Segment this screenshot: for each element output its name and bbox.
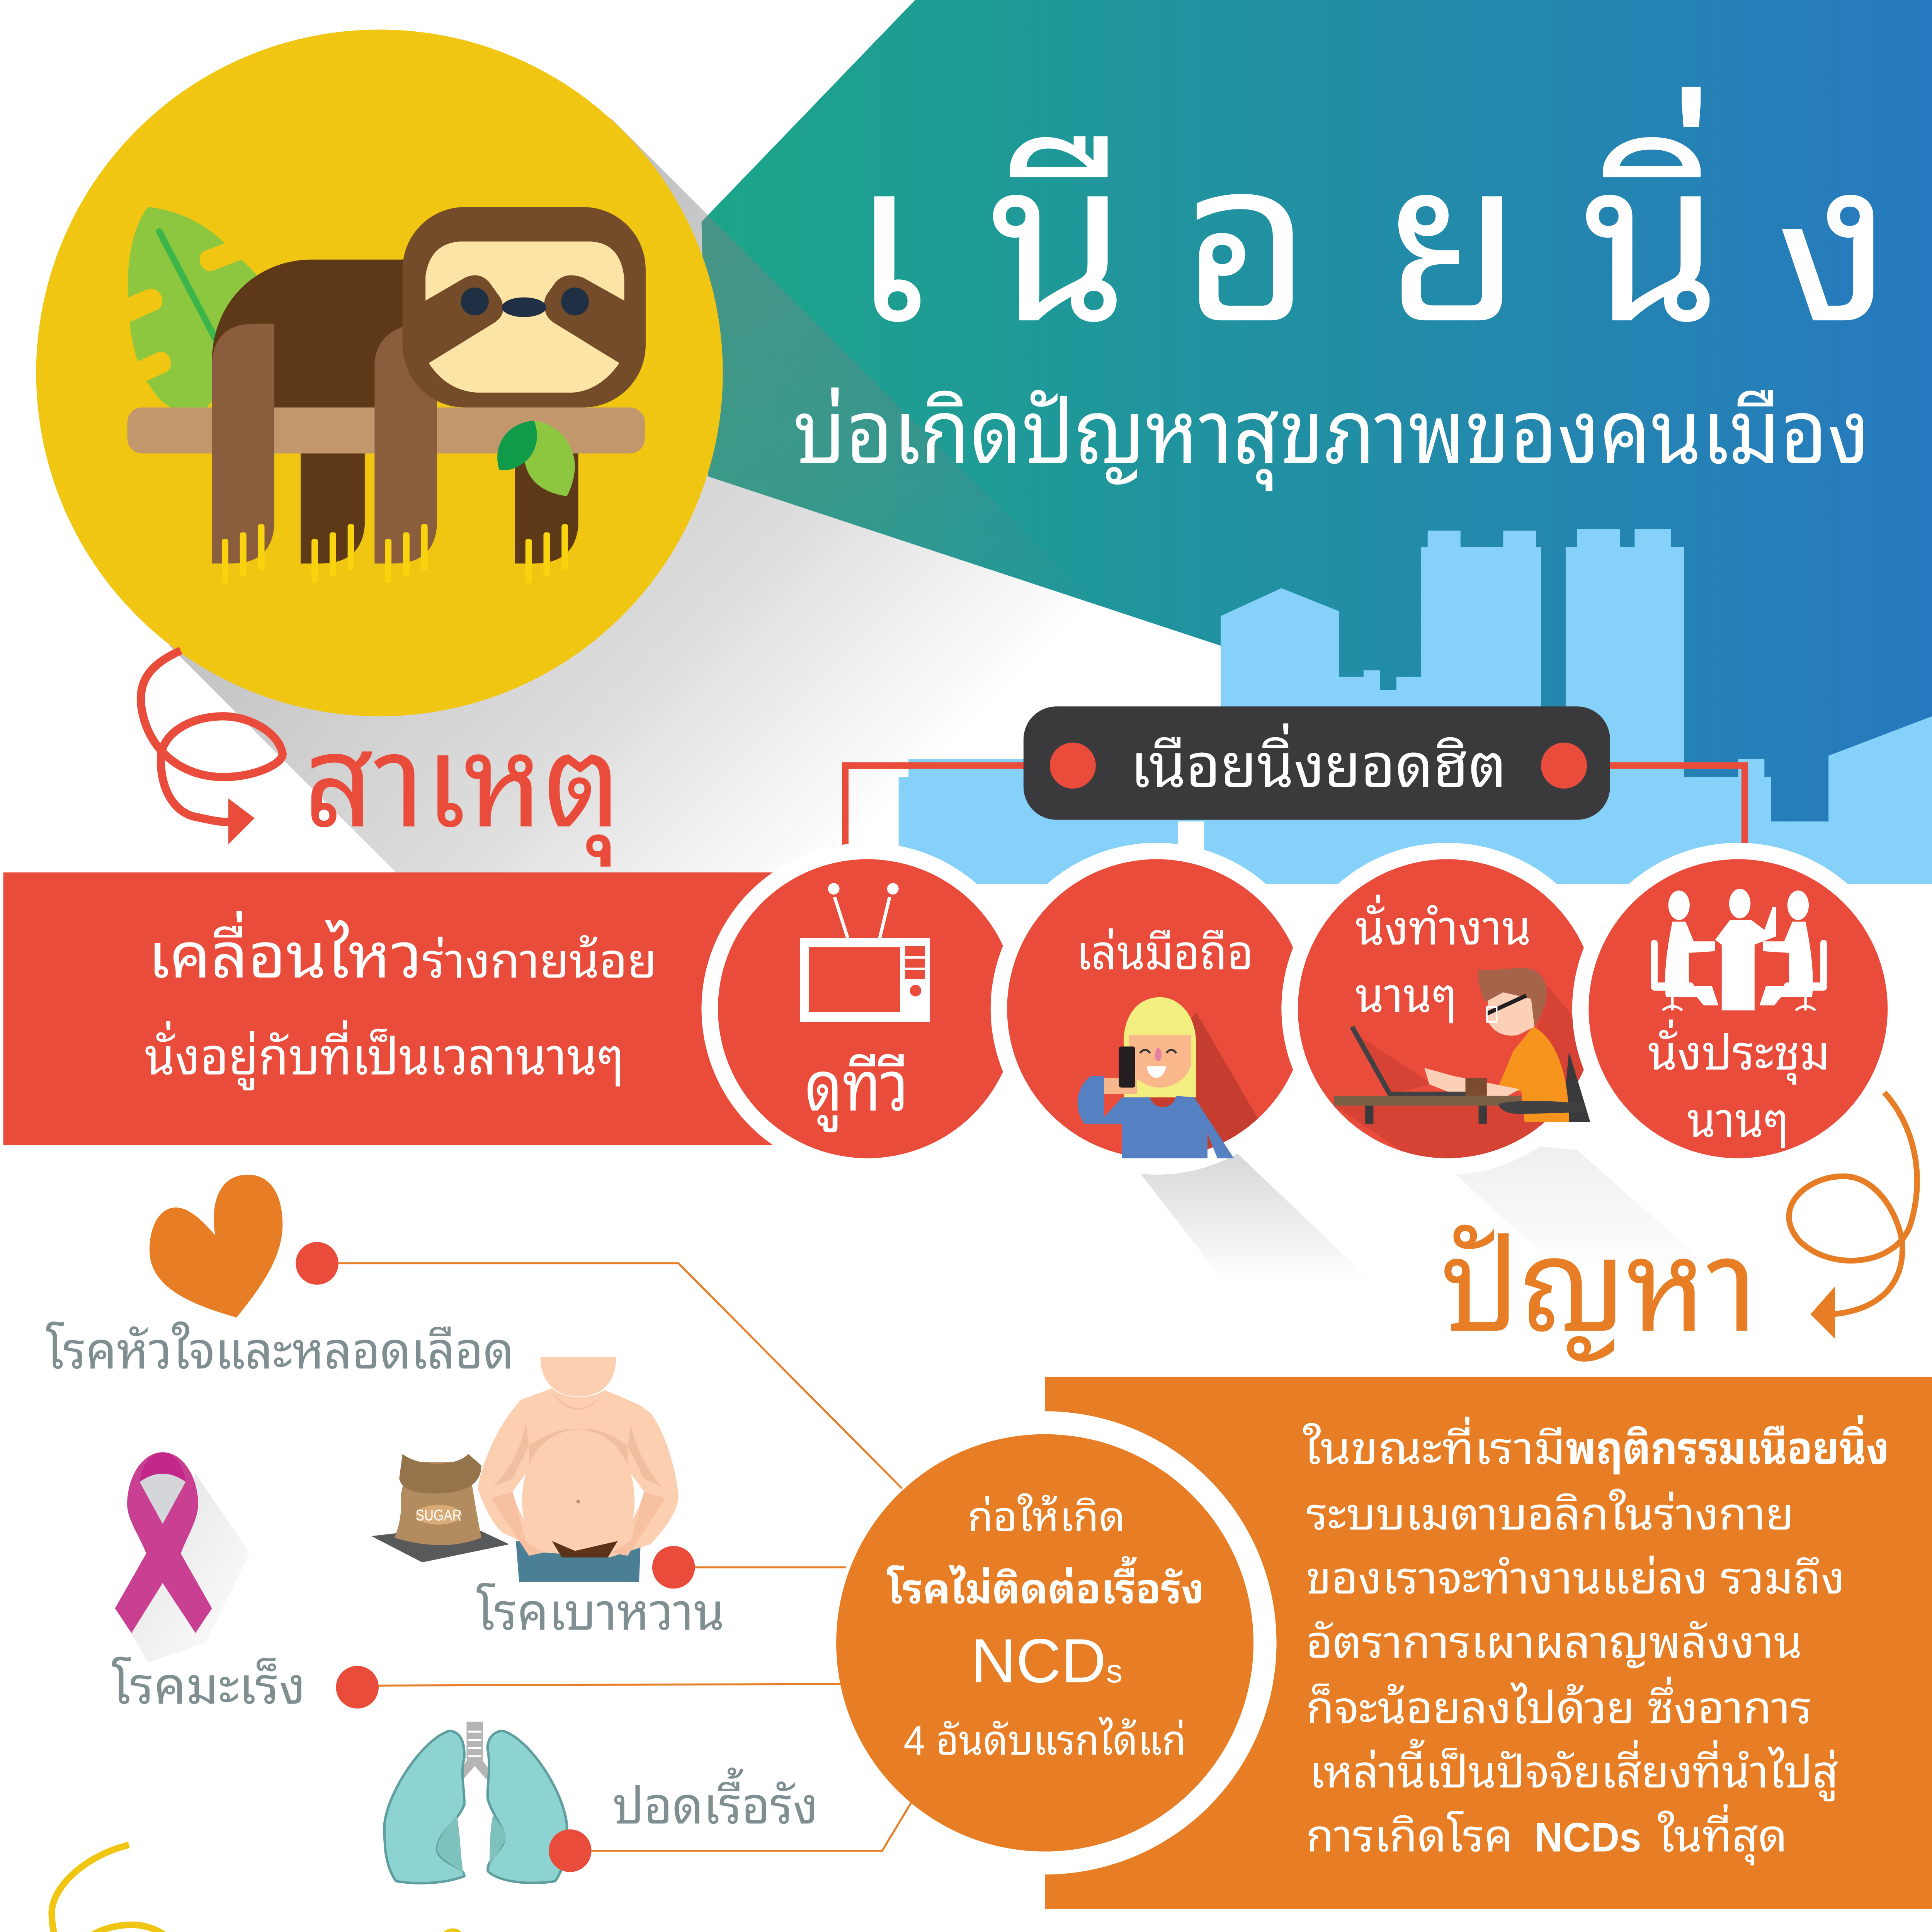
label: chronic lung: ปอดเรื้อรัง [613,1767,818,1834]
NCD text: NCDs [971,1626,1122,1696]
label: desk work: นานๆ [1355,969,1457,1023]
label: meetings: นั่งประชุม [1648,1019,1830,1085]
explanation lines: NCDs [1534,1815,1641,1861]
heading: problems: ปัญหา [1441,1215,1758,1363]
icon: meeting [1651,889,1827,1010]
panel: causes banner [3,872,792,1145]
dot: lungs [549,1829,592,1872]
explanation lines: ในที่สุด [1658,1804,1787,1866]
banner line 1: เคลื่อนไหว [148,911,422,991]
heading: causes: สาเหตุ [304,711,621,868]
explanation lines: การเกิดโรค [1306,1811,1513,1861]
title: ง [1776,118,1892,368]
branch [128,407,645,453]
NCD text: โรคไม่ติดต่อเรื้อรัง [887,1556,1204,1612]
label: desk work: นั่งทำงาน [1355,894,1531,955]
circle: desk work [1281,843,1613,1183]
small leaves [497,420,575,496]
label: heart disease: โรคหัวใจและหลอดเลือด [46,1321,514,1379]
worker shadow [1334,986,1602,1183]
title: นื [989,118,1128,368]
back legs [301,453,578,563]
NCD text: 4 อันดับแรกได้แก่ [903,1716,1186,1764]
curly arrow: causes [141,651,282,844]
city skyline [899,529,1932,884]
pill dots [1050,743,1587,789]
explanation lines: ระบบเมตาบอลิกในร่างกาย [1306,1488,1794,1539]
connector lines to NCD circle [338,1264,913,1851]
banner line 1 [148,911,657,991]
icon: office worker [1334,968,1590,1124]
curly arrow: solutions [52,1845,185,1932]
popular sedentary pill [845,706,1745,862]
icon: TV [800,883,930,1022]
icon: cancer ribbon [115,1452,250,1663]
front arms [212,324,437,563]
title: อ [1181,118,1312,368]
long shadow of yellow circle [169,118,1096,1088]
icon: lungs [384,1722,567,1883]
label: meetings: นานๆ [1687,1094,1789,1148]
jungle leaf [128,207,256,407]
big yellow circle [36,30,723,716]
label: meetings [1648,1019,1830,1148]
explanation line 1: ในขณะที่เรามี [1303,1416,1566,1473]
panel: orange explanation [813,1377,1932,1909]
eyes and nose [461,287,589,317]
icon: overweight man [478,1357,679,1582]
white gap in skyline [1178,821,1204,887]
icon: heart [150,1175,282,1318]
connector lines [845,765,1745,862]
title: เ [851,118,926,368]
label: phone: เล่นมือถือ [1076,927,1253,980]
claws [222,524,568,583]
phone shadow [1150,1012,1258,1149]
icon: sugar sack: SUGAR [416,1506,462,1524]
title: นิ่ [1582,83,1721,368]
banner line 1: ร่างกายน้อย [422,935,657,988]
explanation lines: ของเราจะทำงานแย่ลง รวมถึง [1306,1554,1845,1603]
curly arrow: problems [1789,1092,1917,1339]
label: cancer: โรคมะเร็ง [112,1656,306,1714]
dot: diabetes [652,1546,695,1588]
explanation lines: ก็จะน้อยลงไปด้วย ซึ่งอาการ [1306,1676,1812,1733]
explanation lines [1306,1488,1845,1866]
explanation lines: อัตราการเผาผลาญพลังงาน [1306,1618,1802,1668]
NCD text [887,1493,1204,1764]
label: desk work [1355,894,1531,1023]
dot: cancer [336,1666,379,1709]
dot: heart disease [296,1242,338,1285]
label: TV: ดูทีวี [805,1048,908,1132]
banner line 2: นั่งอยู่กับที่เป็นเวลานานๆ [145,1020,624,1091]
circle: meetings [1572,843,1904,1175]
circle: NCDs [836,1434,1253,1852]
pill text: เนือยนิ่งยอดฮิต [1130,723,1507,800]
label: diabetes: โรคเบาหวาน [476,1582,724,1641]
soft shadows under figures [1122,1134,1717,1281]
circle: watching TV [701,843,1033,1175]
explanation lines: เหล่านี้เป็นปัจจัยเสี่ยงที่นำไปสู่ [1310,1738,1838,1801]
sloth illustration [128,207,646,583]
head [403,207,646,407]
icon: sugar sack [371,1454,509,1562]
face mask [425,242,624,393]
hero gradient background [701,0,1932,881]
circle: phone [991,843,1323,1216]
explanation line 1: พฤติกรรมเนือยนิ่ง [1566,1415,1889,1475]
explanation line 1 [1303,1415,1889,1475]
icon: girl with phone [1078,997,1234,1158]
title: ย [1385,118,1522,368]
body [212,260,411,407]
NCD text: ก่อให้เกิด [968,1493,1125,1540]
